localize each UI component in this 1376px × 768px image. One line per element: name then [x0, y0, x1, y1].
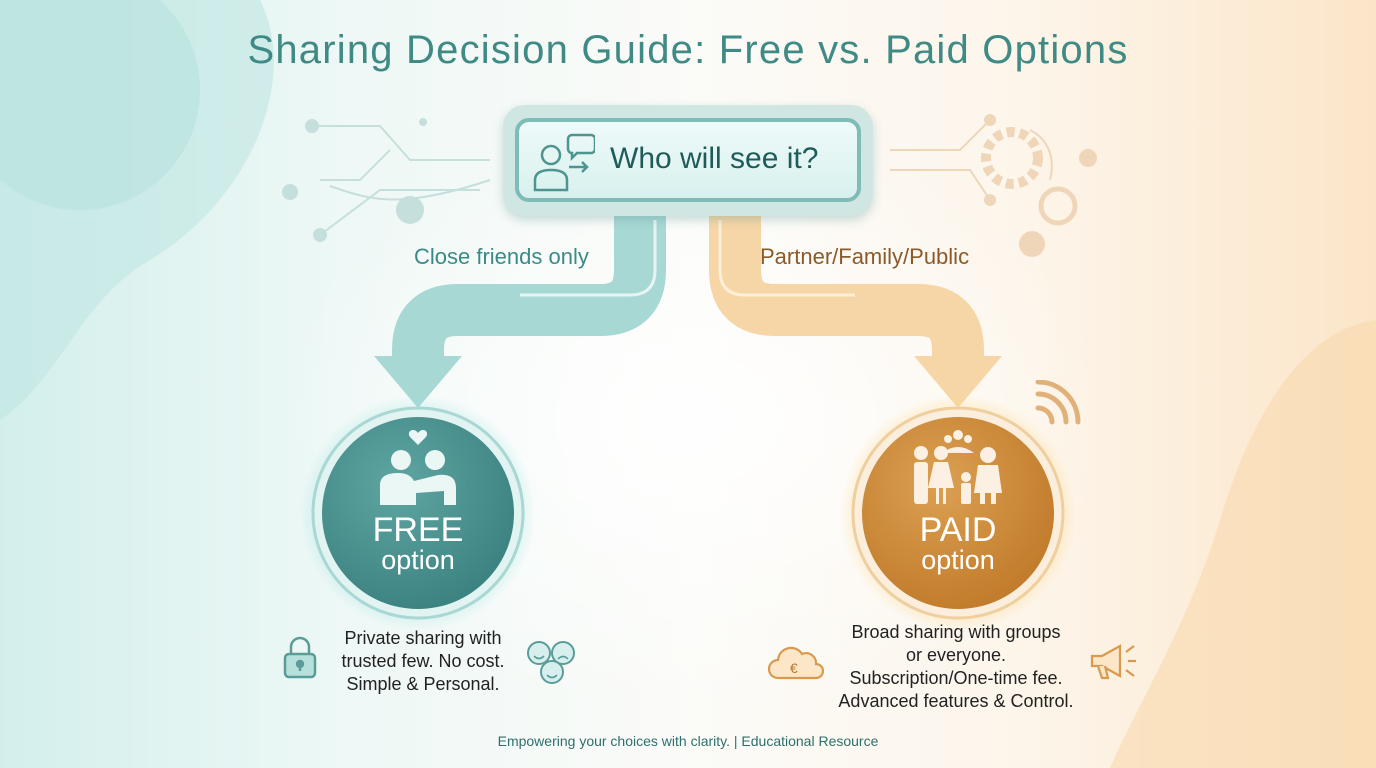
panel: paid option circle: PAID — [920, 511, 996, 549]
icon: megaphone — [1090, 644, 1136, 680]
icon: family group — [914, 430, 1002, 504]
panel: free option circle: FREE — [373, 511, 463, 549]
panel: free option circle — [305, 400, 532, 626]
text: paid description: Subscription/One-time fee. — [849, 668, 1063, 688]
text: free description: Simple & Personal. — [346, 674, 500, 694]
question text: Who will see it? — [610, 142, 818, 175]
icon: signal waves — [1036, 380, 1080, 424]
icon: faces — [527, 641, 575, 684]
text: paid description: or everyone. — [906, 645, 1006, 665]
panel: free option circle: option — [381, 545, 455, 575]
arrow: orange to paid — [720, 210, 1002, 408]
icon: hugging couple — [380, 430, 456, 505]
label: partner family public: Partner/Family/Public — [760, 244, 969, 269]
text: free description: Private sharing with — [344, 628, 502, 648]
icon: euro cloud — [768, 646, 824, 680]
text: paid description: Broad sharing with groups — [851, 622, 1061, 642]
title: Sharing Decision Guide: Free vs. Paid Options — [247, 28, 1129, 72]
icon: person with speech — [534, 134, 595, 192]
panel: paid option circle: option — [921, 545, 995, 575]
text: paid description: Advanced features & Control. — [838, 691, 1074, 711]
decoration: right gears — [890, 114, 1097, 257]
text: free description: trusted few. No cost. — [341, 651, 505, 671]
arrow: teal to free — [374, 210, 655, 408]
label: close friends: Close friends only — [414, 244, 589, 269]
text: paid description — [838, 622, 1074, 711]
panel: paid option circle — [844, 399, 1072, 628]
text: free description — [341, 628, 505, 694]
icon: lock — [284, 636, 316, 678]
icon: euro cloud: € — [790, 660, 798, 676]
footer: Empowering your choices with clarity. | Educational Resource — [498, 733, 878, 749]
decoration: left circuit lines — [282, 118, 490, 242]
question box — [503, 105, 873, 216]
